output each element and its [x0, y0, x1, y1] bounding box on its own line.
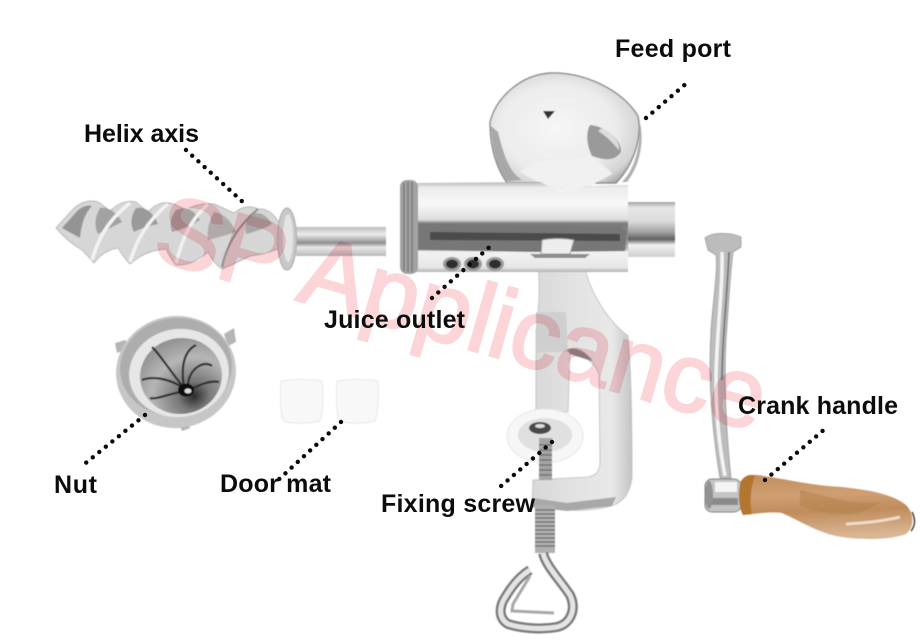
- icon: door mats: [280, 380, 378, 423]
- leader line: door mat: [276, 422, 341, 482]
- icon: helix axis auger: [56, 201, 386, 270]
- label: door mat: Door mat: [220, 470, 332, 498]
- watermark: SP Applicance: SP Applicance: [144, 172, 780, 452]
- label: crank handle: Crank handle: [738, 392, 898, 420]
- label: fixing screw: Fixing screw: [381, 490, 536, 518]
- icon: crank handle: [705, 233, 915, 539]
- leader line: fixing screw: [500, 442, 552, 487]
- icon: juicer feed hopper: [490, 73, 642, 192]
- leader line: feed port: [646, 82, 688, 118]
- leader line: juice outlet: [432, 243, 494, 298]
- icon: nut: [109, 308, 243, 436]
- leader line: helix axis: [186, 150, 245, 204]
- label: nut: Nut: [54, 471, 98, 499]
- leader line: nut: [82, 415, 145, 466]
- leader line: crank handle: [765, 428, 826, 480]
- icon: juicer barrel: [400, 180, 675, 274]
- label: juice outlet: Juice outlet: [324, 306, 466, 334]
- icon: clamp screw and washer: [501, 409, 583, 628]
- label: feed port: Feed port: [615, 35, 732, 63]
- icon: juicer clamp stand: [532, 256, 632, 511]
- label: helix axis: Helix axis: [84, 120, 199, 148]
